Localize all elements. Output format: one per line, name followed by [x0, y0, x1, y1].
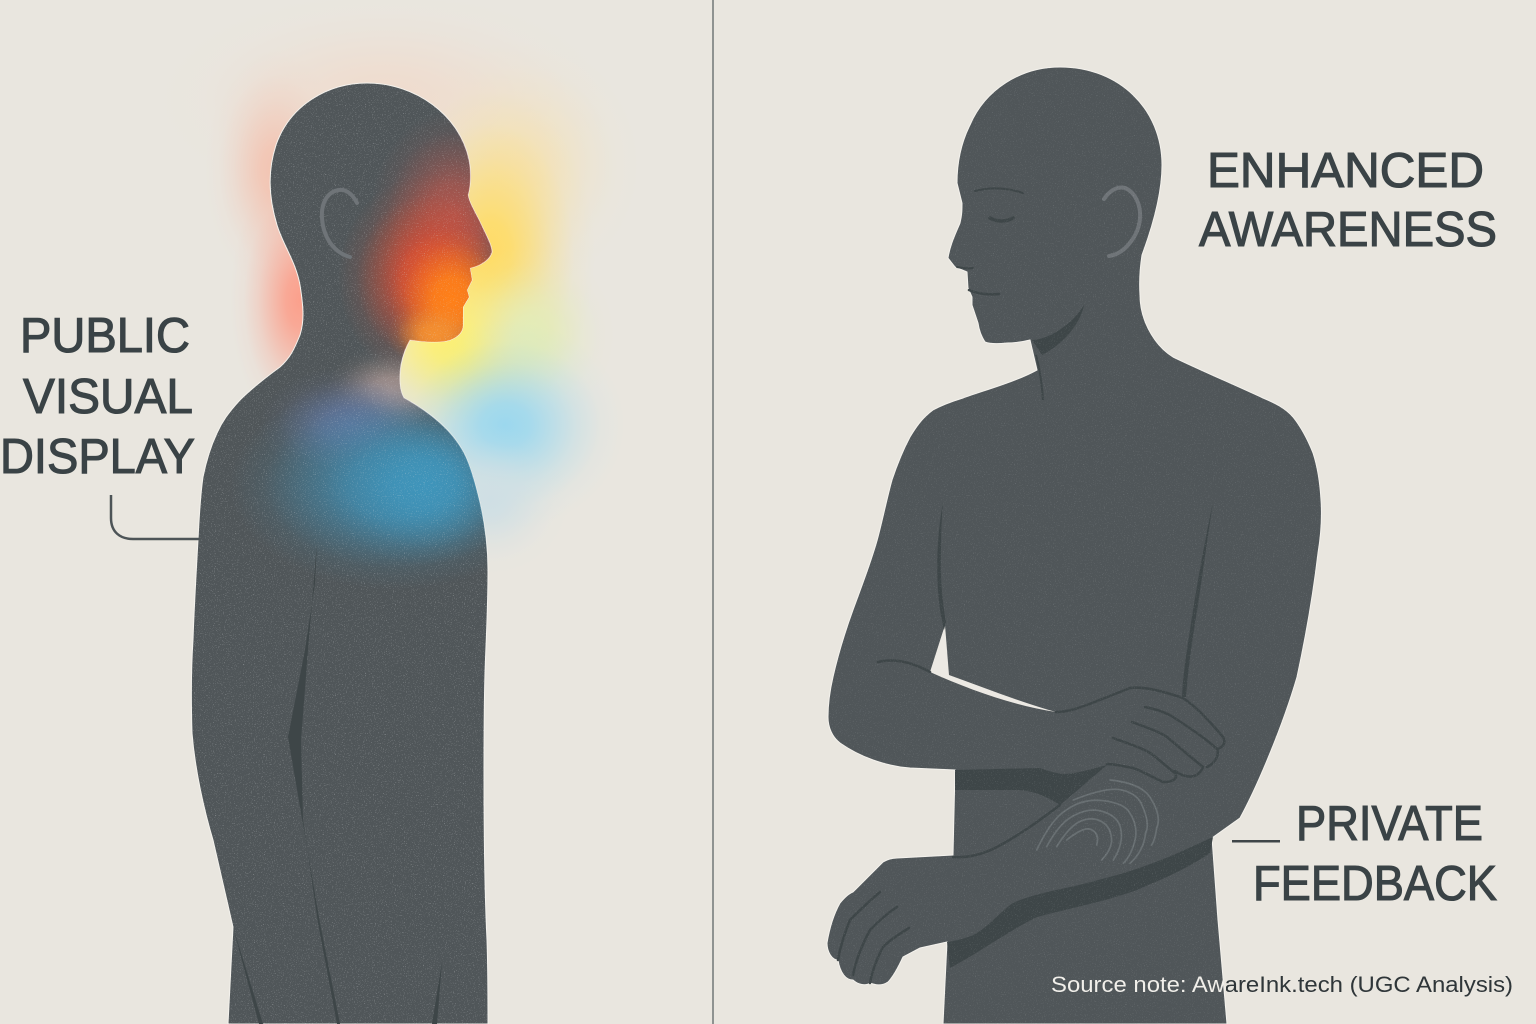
gradient: light on face and shoulder: [192, 84, 492, 1024]
label: enhanced awareness: ENHANCED: [1207, 144, 1484, 198]
grain: [820, 60, 1330, 1024]
figure: left person in profile: [191, 82, 492, 1024]
arm outlines: [878, 660, 1224, 857]
hand fingers: [838, 892, 909, 983]
label: public visual display: DISPLAY: [0, 430, 195, 484]
neck line: [1036, 355, 1043, 400]
ear: [322, 190, 357, 257]
face details: brow, eye, nose, mouth: [957, 188, 1023, 294]
figure: right person looking down at arm: [820, 60, 1330, 1024]
source note: Source note: AwareInk.tech (UGC Analysis): [1051, 972, 1513, 997]
label: private feedback: [1253, 797, 1497, 911]
label: enhanced awareness: [1199, 144, 1497, 257]
label: public visual display: VISUAL: [23, 370, 193, 424]
label: private feedback: PRIVATE: [1296, 797, 1483, 851]
arm shadows: [947, 765, 1213, 968]
divider: [712, 0, 714, 1024]
panel: private feedback: [820, 60, 1497, 1024]
glow: outer colour aura: [155, 0, 640, 575]
haptic fingerprint rings on forearm: [1037, 780, 1158, 863]
ear: [1104, 187, 1140, 256]
label: enhanced awareness: AWARENESS: [1199, 203, 1497, 257]
leader line: public label to figure: [111, 495, 199, 539]
label: public visual display: [0, 309, 195, 484]
panel: public visual display: [3, 47, 598, 1024]
arm crease: [288, 543, 340, 1024]
label: public visual display: PUBLIC: [20, 309, 190, 363]
chest and arm lines: [937, 502, 946, 630]
gap between arm and torso: [930, 625, 1056, 712]
jaw shadow: [1032, 305, 1084, 355]
leader line: private label to arm: [1232, 840, 1280, 842]
label: private feedback: FEEDBACK: [1253, 857, 1497, 911]
